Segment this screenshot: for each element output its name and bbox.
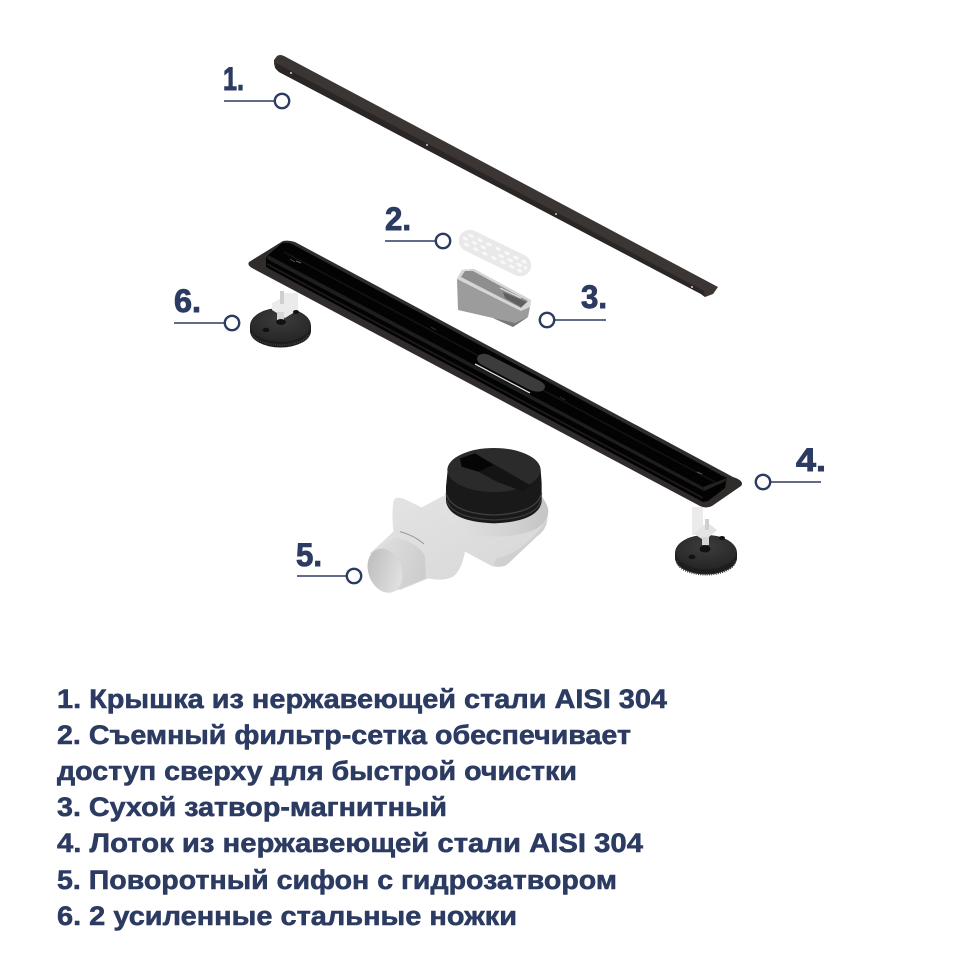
- legend text block: [57, 684, 667, 931]
- legend item 5: 5. Поворотный сифон с гидрозатвором: [57, 865, 617, 895]
- callout 2: 2.: [385, 201, 411, 237]
- callout 1: 1.: [223, 61, 244, 97]
- callout 4: 4.: [796, 442, 826, 478]
- legend item 4: 4. Лоток из нержавеющей стали AISI 304: [57, 828, 643, 858]
- part 4: stainless steel channel: [248, 241, 742, 507]
- callout 1: [223, 61, 289, 108]
- part 5: rotary siphon: [362, 448, 548, 598]
- callout 3: 3.: [581, 279, 607, 315]
- part 6: left steel foot: [250, 291, 311, 348]
- legend item 1: 1. Крышка из нержавеющей стали AISI 304: [57, 684, 667, 714]
- callout 5: 5.: [296, 537, 322, 573]
- part 3: magnetic dry seal: [457, 269, 531, 327]
- part 2: removable mesh filter: [455, 226, 535, 280]
- part 1: stainless steel cover: [274, 55, 718, 297]
- legend item 2 continuation: доступ сверху для быстрой очистки: [57, 756, 577, 786]
- legend item 2: 2. Съемный фильтр-сетка обеспечивает: [57, 720, 631, 750]
- legend item 3: 3. Сухой затвор-магнитный: [57, 792, 447, 822]
- drain opening in channel: [475, 354, 545, 393]
- legend item 6: 6. 2 усиленные стальные ножки: [57, 901, 517, 931]
- callout 4: [756, 442, 826, 489]
- callout 3: [540, 279, 607, 327]
- callout 2: [385, 201, 450, 248]
- callout 6: 6.: [174, 283, 201, 319]
- part 4 foot: right steel foot: [675, 507, 737, 575]
- callout 6: [174, 283, 239, 330]
- callout 5: [296, 537, 361, 583]
